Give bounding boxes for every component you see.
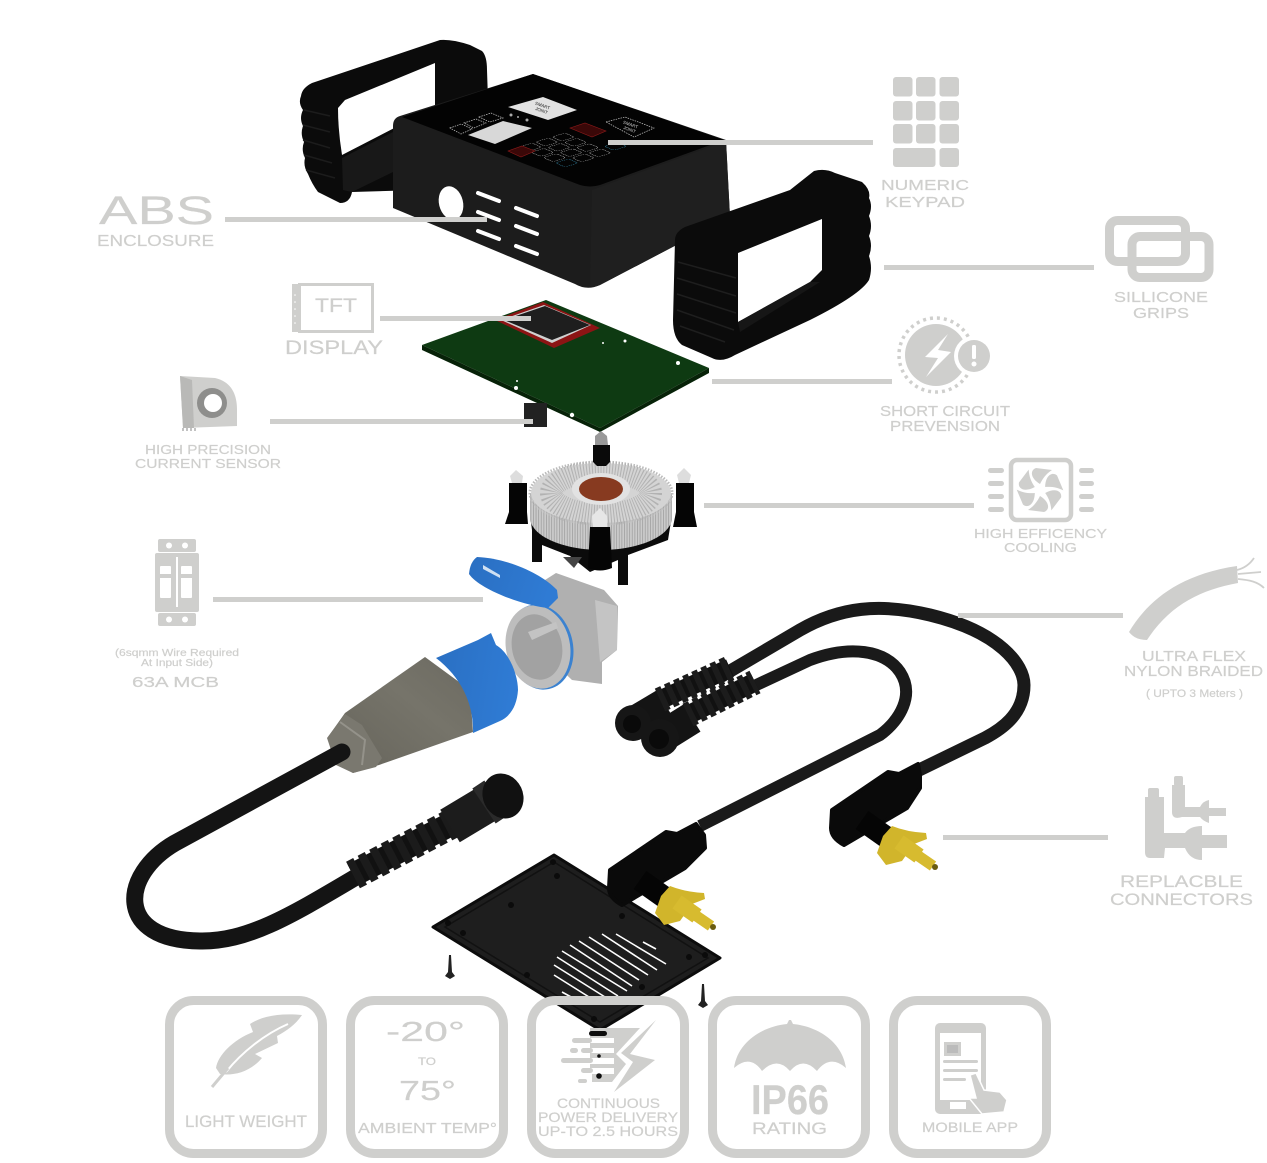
label: replaceable connectors: CONNECTORS bbox=[1110, 890, 1253, 909]
top leg bbox=[593, 445, 610, 466]
leader: MCB bbox=[213, 597, 483, 602]
badge: mobile app bbox=[894, 1000, 1046, 1154]
icon: short circuit bbox=[899, 318, 994, 392]
lid screws bbox=[445, 859, 708, 1022]
enclosure body silhouette bbox=[393, 74, 730, 288]
left leg bbox=[505, 483, 528, 524]
lid slots bbox=[554, 934, 666, 1003]
copper core bbox=[572, 473, 630, 505]
plug blue collar bbox=[436, 633, 518, 733]
icon: fan bbox=[988, 460, 1094, 520]
label: current sensor: HIGH PRECISION bbox=[145, 442, 271, 457]
socket body bbox=[530, 573, 618, 684]
red buttons bbox=[508, 123, 606, 157]
right probe connector bbox=[831, 764, 938, 870]
top logo plate: SMART bbox=[534, 101, 551, 111]
icon: keypad bbox=[893, 77, 959, 167]
text: LIGHT WEIGHT bbox=[185, 1112, 307, 1131]
nav buttons bbox=[450, 113, 503, 134]
badge: light weight bbox=[170, 1000, 322, 1154]
label: TFT display bbox=[285, 284, 383, 359]
icon: phone and hand bbox=[935, 1023, 1007, 1114]
fin top bbox=[531, 463, 671, 523]
leader: silicone grips bbox=[884, 265, 1094, 270]
label: ABS enclosure bbox=[97, 189, 214, 250]
yellow nozzle bbox=[877, 826, 938, 870]
label: numeric keypad: NUMERIC bbox=[881, 177, 969, 194]
label: high efficiency cooling: COOLING bbox=[1004, 540, 1077, 555]
badge: continuous power delivery bbox=[532, 1000, 684, 1154]
label: MCB: (6sqmm Wire Required bbox=[115, 648, 239, 659]
text bbox=[538, 1095, 679, 1139]
icon: TFT screen: TFT bbox=[315, 296, 357, 317]
lid fasteners bbox=[589, 1031, 607, 1079]
side hole bbox=[435, 184, 467, 222]
badge: ambient temperature bbox=[350, 1000, 504, 1154]
side vents bbox=[478, 193, 537, 254]
top logo plate: JOINT bbox=[535, 106, 549, 115]
icon: feather bbox=[212, 1014, 302, 1087]
icon: breaker bbox=[155, 539, 199, 626]
label: ultra flex nylon braided bbox=[1124, 558, 1264, 700]
cooler frame bbox=[530, 515, 672, 585]
text: RATING bbox=[752, 1119, 827, 1138]
loose screw right bbox=[698, 984, 708, 1008]
upper cable gland bbox=[615, 668, 730, 741]
input plug bbox=[327, 633, 518, 773]
label: ABS enclosure: ABS bbox=[99, 189, 214, 233]
icon: grips bbox=[1110, 220, 1209, 278]
enclosure top face bbox=[402, 74, 724, 186]
icon: current sensor bbox=[180, 376, 237, 431]
icon: connectors bbox=[1145, 776, 1227, 860]
text: POWER DELIVERY bbox=[538, 1109, 679, 1125]
label: MCB: At Input Side) bbox=[141, 658, 213, 669]
label: silicone grips: GRIPS bbox=[1133, 305, 1189, 322]
label: numeric keypad: KEYPAD bbox=[885, 194, 965, 211]
leader: ABS enclosure bbox=[225, 217, 487, 222]
TFT screen bbox=[501, 305, 591, 343]
keypad keys bbox=[519, 127, 629, 167]
top display window bbox=[468, 121, 532, 144]
logo outline badge: JOINT bbox=[623, 125, 637, 134]
fin body bbox=[530, 493, 672, 550]
icon: cable bbox=[1129, 558, 1264, 640]
label: current sensor: CURRENT SENSOR bbox=[135, 456, 281, 471]
yellow nozzle bbox=[655, 886, 716, 930]
label: silicone grips bbox=[1110, 220, 1209, 322]
label: current sensor bbox=[135, 376, 281, 471]
icon: umbrella bbox=[734, 1020, 846, 1071]
label: silicone grips: SILLICONE bbox=[1114, 289, 1208, 306]
socket ring bbox=[498, 599, 578, 695]
leader: nylon cable bbox=[958, 613, 1123, 618]
label: ultra flex nylon braided: NYLON BRAIDED bbox=[1124, 663, 1263, 680]
heat sink cooler bbox=[505, 431, 697, 585]
inlet socket bbox=[469, 557, 618, 696]
logo outline badge: SMART bbox=[622, 120, 639, 130]
front silicone grip bbox=[673, 170, 871, 360]
temperature values: TO bbox=[418, 1056, 437, 1068]
loose screw left bbox=[445, 955, 455, 979]
fin teeth bbox=[530, 462, 672, 524]
text: MOBILE APP bbox=[922, 1119, 1018, 1135]
blue lid bbox=[469, 557, 558, 608]
perforated base lid bbox=[433, 855, 720, 1030]
label: replaceable connectors: REPLACBLE bbox=[1120, 872, 1243, 891]
TFT module bbox=[495, 302, 600, 348]
blue seal bbox=[499, 598, 581, 696]
front leg bbox=[588, 527, 612, 570]
text: AMBIENT TEMP° bbox=[358, 1120, 497, 1137]
leader: TFT display bbox=[380, 316, 531, 321]
leader: short circuit bbox=[712, 379, 892, 384]
leader: cooling bbox=[704, 503, 974, 508]
board mounting holes bbox=[514, 340, 680, 417]
temperature values: -20° bbox=[386, 1016, 465, 1047]
plug rubber boot bbox=[328, 657, 473, 773]
text: UP-TO 2.5 HOURS bbox=[538, 1123, 678, 1139]
left probe connector bbox=[609, 824, 716, 930]
circuit board bbox=[422, 300, 709, 432]
top logo plate bbox=[508, 97, 577, 120]
Y split braided cables bbox=[615, 608, 1024, 826]
label: MCB bbox=[115, 539, 239, 691]
label: ultra flex nylon braided: ( UPTO 3 Meters ) bbox=[1146, 688, 1243, 700]
leader: keypad bbox=[608, 140, 873, 145]
text: IP66 bbox=[751, 1076, 829, 1123]
label: MCB: 63A MCB bbox=[132, 674, 219, 691]
input cable gland bbox=[353, 767, 531, 875]
label: short circuit prevension: PREVENSION bbox=[890, 418, 1000, 435]
temperature values bbox=[386, 1016, 465, 1106]
label: short circuit prevension bbox=[880, 318, 1010, 435]
status icons bbox=[510, 114, 528, 122]
label: numeric keypad bbox=[881, 77, 969, 211]
label: short circuit prevension: SHORT CIRCUIT bbox=[880, 403, 1010, 420]
lower cable gland bbox=[641, 682, 755, 757]
badge: IP66 rating bbox=[712, 1000, 866, 1154]
icon: power bolt bbox=[561, 1020, 656, 1092]
label: replaceable connectors bbox=[1110, 776, 1253, 909]
plug nut bbox=[327, 714, 382, 773]
temperature values: 75° bbox=[399, 1075, 456, 1106]
right leg bbox=[673, 483, 697, 527]
leader: connectors bbox=[943, 835, 1108, 840]
enclosure bbox=[393, 74, 730, 288]
label: high efficiency cooling: HIGH EFFICENCY bbox=[974, 526, 1107, 541]
label: TFT display: DISPLAY bbox=[285, 338, 383, 359]
label: ABS enclosure: ENCLOSURE bbox=[97, 233, 214, 250]
label: ultra flex nylon braided: ULTRA FLEX bbox=[1142, 648, 1246, 665]
current sensor post bbox=[524, 403, 547, 427]
rear silicone grip bbox=[300, 40, 488, 203]
main input cable bbox=[135, 752, 531, 941]
text: CONTINUOUS bbox=[557, 1095, 660, 1111]
label: high efficiency cooling bbox=[974, 460, 1107, 555]
enclosure right face bbox=[590, 141, 730, 287]
logo outline badge bbox=[606, 117, 654, 137]
leader: current sensor bbox=[270, 419, 533, 424]
